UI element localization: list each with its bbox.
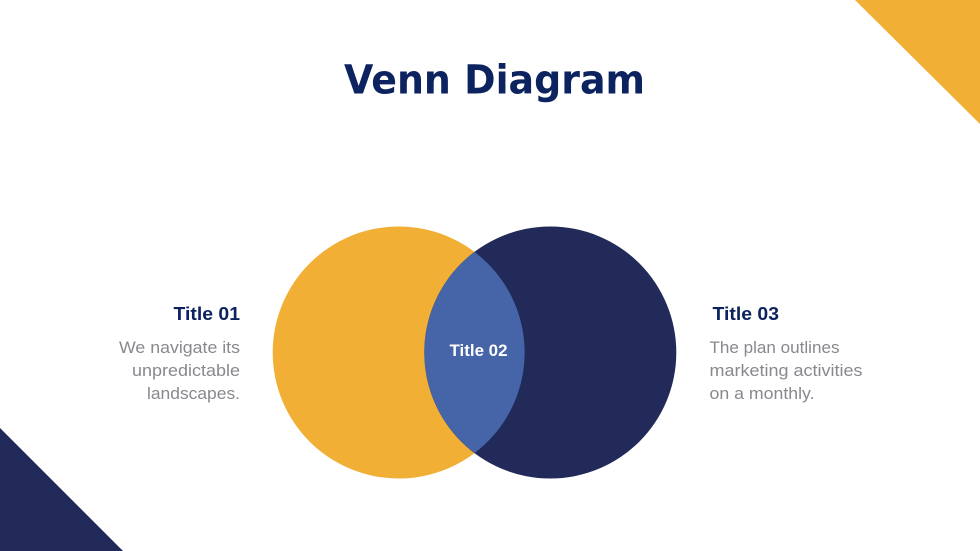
- venn diagram: [273, 226, 676, 478]
- left text block: [119, 303, 245, 403]
- overlap region: [424, 252, 525, 453]
- body text: right: on a monthly.: [710, 384, 814, 403]
- heading: Title 01: Title 01: [174, 303, 240, 324]
- body text: left: landscapes.: [147, 384, 240, 403]
- overlap label: Title 02: [450, 342, 508, 360]
- body text: left: We navigate its: [119, 338, 240, 357]
- body text: left: unpredictable: [132, 361, 240, 380]
- circle: right: [424, 226, 676, 478]
- circle: left: [273, 226, 525, 478]
- corner triangle: bottom left: [0, 428, 123, 551]
- heading: Title 03: Title 03: [712, 303, 779, 324]
- body text: right: marketing activities: [710, 361, 862, 380]
- right text block: [710, 303, 867, 403]
- body text: right: The plan outlines: [710, 338, 840, 357]
- title: Venn Diagram: [344, 56, 645, 104]
- corner triangle: top right: [855, 0, 980, 124]
